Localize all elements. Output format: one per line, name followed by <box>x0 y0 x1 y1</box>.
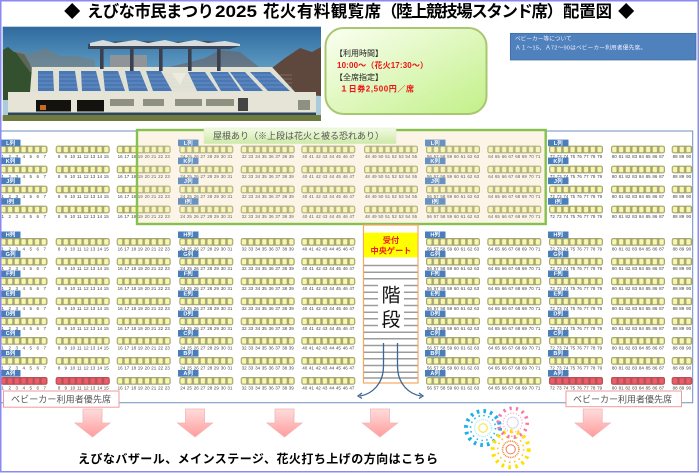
seat row L: L列 <box>184 139 193 147</box>
seat row H: H列 <box>6 231 16 239</box>
seat row J: J列 <box>6 177 15 185</box>
seat row G <box>0 250 692 271</box>
info box: time and ticket <box>326 28 486 114</box>
gate sign <box>364 233 418 257</box>
seat row D: D列 <box>553 310 563 318</box>
callout: stroller priority right: ベビーカー利用者優先席 <box>573 394 672 404</box>
seat row G: G列 <box>6 250 16 258</box>
seat row C <box>0 329 692 350</box>
seat row H: H列 <box>430 231 440 239</box>
seat row F <box>0 270 692 291</box>
callout: stroller priority left: ベビーカー利用者優先席 <box>11 394 111 404</box>
seat row A with priority seats <box>0 369 692 390</box>
seat row C: C列 <box>430 329 440 337</box>
seat row D <box>0 310 692 331</box>
title: 花火有料観覧席 <box>263 2 381 21</box>
callout: stroller priority right <box>566 391 682 407</box>
seat row K: K列 <box>553 157 563 165</box>
callout: stroller priority left <box>4 391 119 407</box>
seat row E: E列 <box>184 290 193 298</box>
arrows: stair exits <box>358 343 423 398</box>
arrows: direction <box>75 409 610 437</box>
seat row E <box>0 290 692 311</box>
seat row A with priority seats: A列 <box>6 369 16 377</box>
direction caption: えびなバザール、メインステージ、花火打ち上げの方向はこちら <box>78 451 438 466</box>
seat row I: I列 <box>185 197 192 205</box>
title: 配置図 <box>563 3 612 21</box>
seating area frame <box>0 131 693 403</box>
note: stroller seats <box>510 33 696 60</box>
seat row A with priority seats: A列 <box>430 369 440 377</box>
seat row E: E列 <box>431 290 440 298</box>
title: ◆ <box>64 3 81 21</box>
firework: cyan <box>466 411 500 445</box>
seat row K: K列 <box>430 157 440 165</box>
seat row G: G列 <box>553 250 564 258</box>
seat row B: B列 <box>430 349 440 357</box>
seat row C: C列 <box>553 329 563 337</box>
roof label: 屋根あり（※上段は花火と被る恐れあり） <box>213 130 384 141</box>
title <box>64 2 635 21</box>
seat row G: G列 <box>430 250 441 258</box>
title: （陸上競技場スタンド席） <box>381 2 563 21</box>
seat row H: H列 <box>553 231 563 239</box>
seat row I: I列 <box>7 197 15 205</box>
roofed area background <box>137 130 546 224</box>
stairs label: 階 <box>381 284 401 306</box>
seat row I: I列 <box>555 197 562 205</box>
seat row A with priority seats: A列 <box>183 369 193 377</box>
seat row B: B列 <box>553 349 563 357</box>
roof label <box>204 128 396 144</box>
seat row C: C列 <box>183 329 193 337</box>
gate sign: 受付 <box>383 235 399 245</box>
photo: stadium stand <box>3 27 321 121</box>
stair treads <box>364 266 418 378</box>
firework: pink <box>498 408 527 437</box>
seat row L: L列 <box>554 139 563 147</box>
seat row K: K列 <box>183 157 193 165</box>
seat row L: L列 <box>6 139 16 147</box>
note: stroller seats: Ａ１～15、Ａ72～90はベビーカー利用者優先席。 <box>515 44 646 52</box>
seat row K <box>0 157 692 179</box>
gate sign: 中央ゲート <box>371 246 411 256</box>
mask under the stairs <box>360 383 420 393</box>
stairs label <box>381 284 401 331</box>
seat row J: J列 <box>554 177 563 185</box>
seat row L <box>0 139 692 159</box>
seat row F: F列 <box>431 270 440 278</box>
seat row E: E列 <box>6 290 16 298</box>
info box: time and ticket: 【全席指定】 <box>335 72 383 82</box>
seat row F: F列 <box>554 270 563 278</box>
seat row B: B列 <box>183 349 193 357</box>
title: 2025 <box>215 3 257 21</box>
seat row B: B列 <box>6 349 16 357</box>
icon: fireworks <box>466 408 529 467</box>
central gate and stairs <box>364 225 418 383</box>
note: stroller seats: ベビーカー等について <box>515 34 572 42</box>
seat row F: F列 <box>184 270 193 278</box>
seat row J: J列 <box>184 177 193 185</box>
title: えびな市民まつり <box>87 2 214 21</box>
seat row F: F列 <box>6 270 16 278</box>
seat row J: J列 <box>431 177 440 185</box>
seat row E: E列 <box>554 290 563 298</box>
seat row C: C列 <box>6 329 16 337</box>
seat row I: I列 <box>432 197 439 205</box>
seat row H: H列 <box>183 231 193 239</box>
seat row A with priority seats: A列 <box>553 369 563 377</box>
stairs label: 段 <box>381 309 401 331</box>
info box: time and ticket: 【利用時間】 <box>335 48 383 58</box>
firework: yellow <box>493 431 529 467</box>
seat row D: D列 <box>183 310 193 318</box>
info box: time and ticket: 10:00～（花火17:30～） <box>337 60 428 70</box>
seat row L: L列 <box>431 139 440 147</box>
seat row J <box>0 177 692 199</box>
title: ◆ <box>618 3 635 21</box>
info box: time and ticket: １日券2,500円／席 <box>340 84 414 94</box>
seat row D: D列 <box>6 310 16 318</box>
seat row I <box>0 197 692 219</box>
roofed area highlight <box>137 130 546 224</box>
seat row K: K列 <box>6 157 16 165</box>
seat row G: G列 <box>183 250 194 258</box>
seat row H <box>0 231 692 251</box>
seat row D: D列 <box>430 310 440 318</box>
seat row B <box>0 349 692 370</box>
